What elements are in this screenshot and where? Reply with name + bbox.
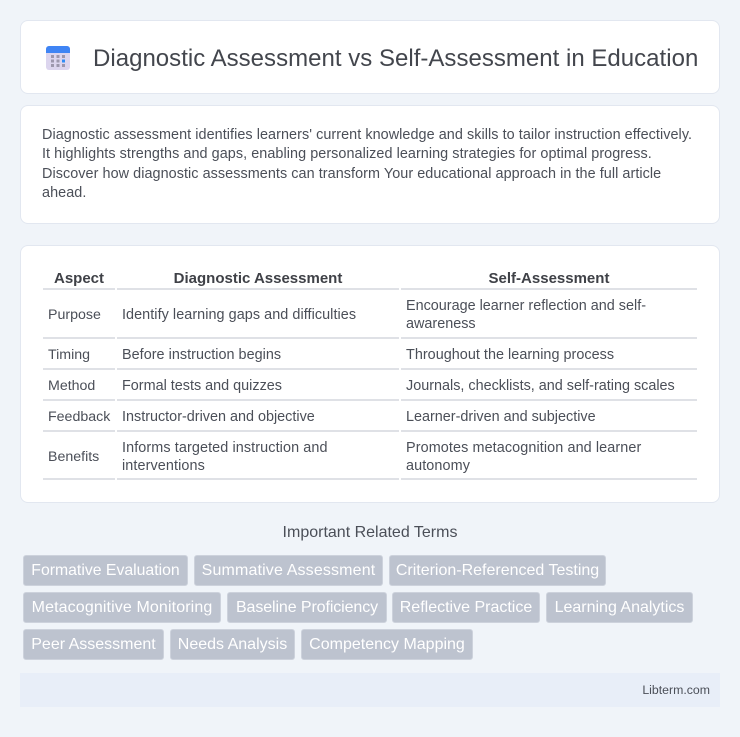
row: Benefits diagnostic: Informs targeted instruction and [122, 440, 328, 456]
row: Benefits diagnostic: interventions [122, 458, 205, 474]
tag [170, 629, 295, 660]
tag [389, 555, 606, 586]
row: Timing diagnostic: Before instruction begins [122, 347, 281, 363]
row: Benefits diagnostic [122, 440, 328, 474]
table header: Aspect: Aspect [54, 270, 104, 287]
row: Purpose self-assessment: awareness [406, 316, 476, 332]
row: Timing self-assessment: Throughout the learning process [406, 347, 614, 363]
tag: Learning Analytics [555, 599, 684, 616]
row: Benefits self-assessment: autonomy [406, 458, 470, 474]
tag [23, 629, 164, 660]
tag: Criterion-Referenced Testing [396, 562, 599, 579]
tag: Baseline Proficiency [236, 599, 378, 616]
tag [23, 555, 188, 586]
table header: Self-Assessment: Self-Assessment [489, 270, 609, 287]
tag: Reflective Practice [400, 599, 532, 616]
title: Diagnostic Assessment vs Self-Assessment in Education [93, 45, 698, 72]
row: Feedback self-assessment: Learner-driven and subjective [406, 409, 596, 425]
text: description line 2: It highlights strengths and gaps, enabling personalized learning strategies for optimal progress. [42, 146, 652, 162]
table header: Diagnostic Assessment: Diagnostic Assessment [174, 270, 342, 287]
row: Benefits self-assessment [406, 440, 642, 474]
row: Method label: Method [48, 378, 95, 394]
tag: Competency Mapping [309, 636, 465, 653]
footer [20, 673, 720, 707]
tag [546, 592, 693, 623]
row: Timing label: Timing [48, 347, 90, 363]
row: Method diagnostic: Formal tests and quizzes [122, 378, 282, 394]
row: Feedback diagnostic: Instructor-driven and objective [122, 409, 315, 425]
panel: comparison table [20, 245, 720, 503]
text: description line 3: Discover how diagnostic assessments can transform Your educational approach in the full article [42, 166, 661, 182]
tag [194, 555, 383, 586]
row: Feedback label: Feedback [48, 409, 110, 425]
icon: calendar [46, 46, 70, 70]
tag [392, 592, 540, 623]
panel: header [20, 20, 720, 94]
heading: related terms: Important Related Terms [283, 524, 457, 541]
row: Purpose self-assessment: Encourage learner reflection and self- [406, 298, 646, 314]
tag: Formative Evaluation [31, 562, 180, 579]
tag [301, 629, 473, 660]
row: Benefits self-assessment: Promotes metacognition and learner [406, 440, 641, 456]
table: comparison [43, 270, 697, 480]
tag: Needs Analysis [178, 636, 287, 653]
footer: source credit: Libterm.com [642, 683, 710, 697]
tag [227, 592, 387, 623]
tags: related terms [23, 555, 693, 660]
row: Purpose label: Purpose [48, 307, 101, 323]
row: Benefits label: Benefits [48, 449, 99, 465]
panel: description [20, 105, 720, 224]
tag: Peer Assessment [31, 636, 156, 653]
tag: Metacognitive Monitoring [32, 599, 212, 616]
text: description line 4: ahead. [42, 185, 86, 201]
row: Purpose diagnostic: Identify learning gaps and difficulties [122, 307, 356, 323]
row: Method self-assessment: Journals, checklists, and self-rating scales [406, 378, 675, 394]
row: Purpose self-assessment [406, 298, 646, 332]
text: description line 1: Diagnostic assessment identifies learners' current knowledge and skills to tailor instruction effectively. [42, 127, 692, 143]
tag: Summative Assessment [202, 562, 375, 579]
tag [23, 592, 221, 623]
